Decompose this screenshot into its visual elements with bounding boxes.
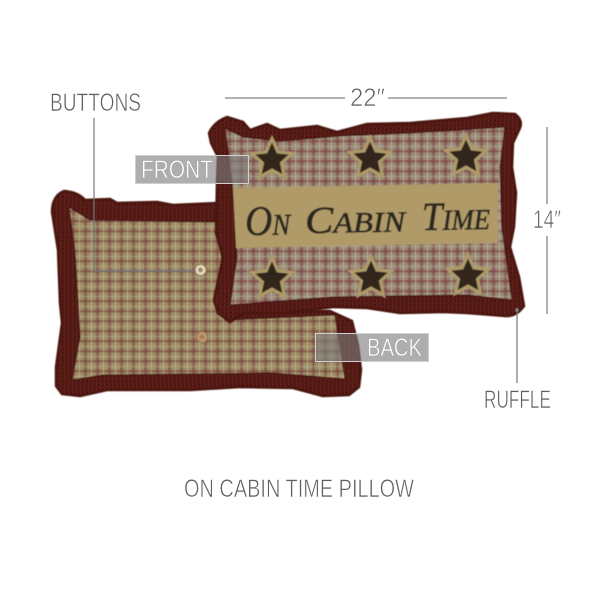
star: bottom right bbox=[444, 251, 492, 296]
callout: front: FRONT bbox=[141, 156, 213, 184]
front plaid panel bbox=[225, 127, 512, 305]
label: buttons: BUTTONS bbox=[50, 89, 141, 117]
pillow lettering: TIME bbox=[422, 193, 491, 239]
back ruffle bbox=[52, 191, 361, 396]
star: top left bbox=[248, 135, 296, 180]
dimension: height 14 inches: 14″ bbox=[533, 206, 561, 234]
pillow lettering: ON bbox=[245, 198, 292, 245]
callout: back: BACK bbox=[367, 334, 422, 362]
label: ruffle bbox=[484, 308, 551, 414]
pillow lettering: CABIN bbox=[305, 198, 407, 242]
star: top right bbox=[442, 132, 490, 177]
burlap band bbox=[233, 183, 498, 248]
dimension: width 22 inches: 22″ bbox=[350, 84, 385, 112]
button: bottom bbox=[196, 332, 208, 342]
leader line: buttons bbox=[94, 118, 196, 271]
back plaid panel bbox=[69, 207, 345, 380]
front ruffle bbox=[209, 113, 524, 322]
pillow: back bbox=[52, 191, 361, 396]
star: top center bbox=[346, 134, 394, 179]
pillow: front bbox=[209, 113, 524, 322]
title: ON CABIN TIME PILLOW bbox=[184, 475, 414, 503]
button: top bbox=[195, 264, 206, 276]
star: bottom center bbox=[347, 253, 395, 298]
callout: back bbox=[316, 334, 428, 362]
label: ruffle: RUFFLE bbox=[484, 386, 551, 414]
pillow lettering bbox=[245, 193, 491, 245]
star: bottom left bbox=[248, 254, 296, 299]
